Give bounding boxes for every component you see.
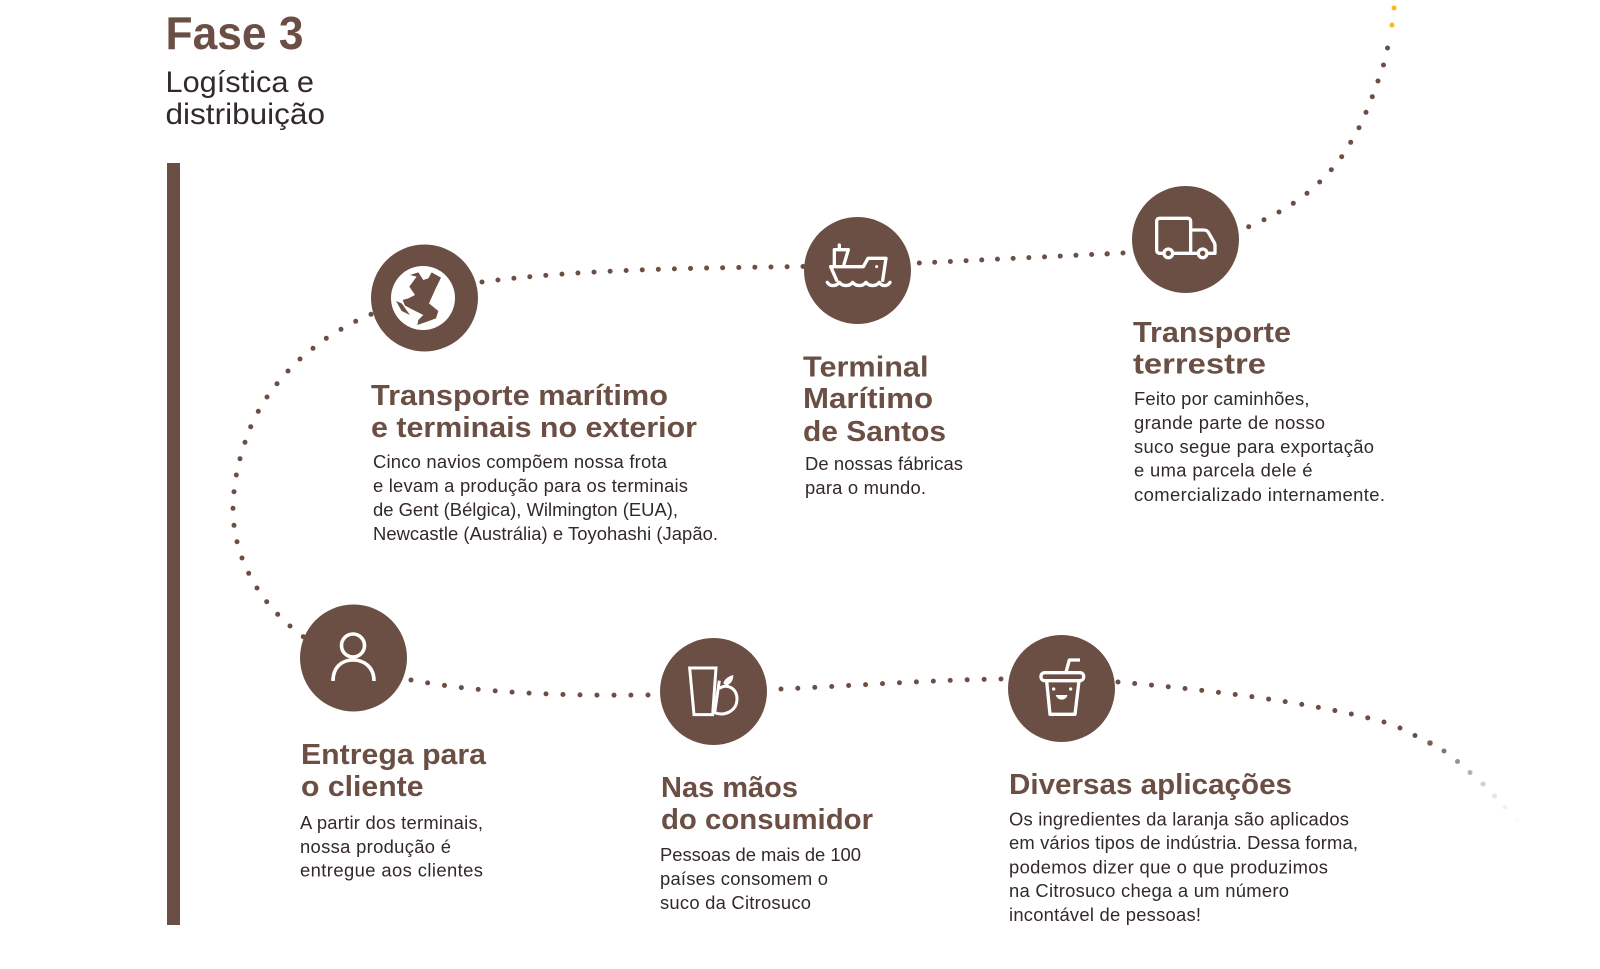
panel: Transporte marítimo: Cinco navios compõem nossa frota: [373, 451, 668, 472]
title: Logística e: [166, 66, 314, 99]
panel: Transporte terrestre: Feito por caminhões,: [1134, 388, 1310, 409]
panel: Nas mãos do consumidor: suco da Citrosuco: [660, 892, 811, 913]
panel: Entrega para o cliente: entregue aos clientes: [300, 860, 483, 880]
panel: Transporte terrestre: comercializado internamente.: [1134, 484, 1385, 505]
panel: Transporte terrestre: e uma parcela dele é: [1134, 460, 1312, 480]
panel: Transporte terrestre: grande parte de nosso: [1134, 412, 1325, 433]
panel: Diversas aplicações: em vários tipos de indústria. Dessa forma,: [1009, 832, 1358, 853]
panel: Nas mãos do consumidor: Pessoas de mais de 100: [660, 844, 861, 865]
panel: Nas mãos do consumidor: Nas mãos: [661, 772, 798, 804]
panel: Transporte terrestre: Transporte: [1133, 317, 1291, 349]
panel: Terminal Marítimo de Santos: De nossas fábricas: [805, 453, 963, 474]
panel: Diversas aplicações: [1009, 769, 1358, 925]
icon: truck: [1132, 186, 1239, 293]
panel: Terminal Marítimo de Santos: de Santos: [803, 416, 946, 448]
icon: globe: [371, 244, 478, 352]
panel: Transporte marítimo: e levam a produção para os terminais: [373, 475, 688, 496]
dotted route: [230, 6, 1519, 822]
panel: Terminal Marítimo de Santos: Terminal: [803, 352, 928, 384]
panel: Diversas aplicações: incontável de pessoas!: [1009, 904, 1201, 925]
panel: Diversas aplicações: na Citrosuco chega a um número: [1009, 880, 1289, 901]
panel: Diversas aplicações: Os ingredientes da laranja são aplicados: [1009, 808, 1349, 830]
panel: Transporte marítimo: Newcastle (Austrália) e Toyohashi (Japão.: [373, 523, 718, 544]
title: Fase 3: [166, 7, 304, 59]
panel: Entrega para o cliente: A partir dos terminais,: [300, 812, 483, 833]
title: distribuição: [166, 98, 325, 131]
panel: Terminal Marítimo de Santos: [803, 352, 963, 498]
panel: Nas mãos do consumidor: países consomem o: [660, 868, 828, 889]
panel: Transporte terrestre: suco segue para exportação: [1134, 436, 1374, 457]
title: [166, 7, 325, 131]
icon: ship: [804, 217, 911, 324]
panel: Transporte marítimo: [371, 380, 718, 544]
panel: Transporte terrestre: terrestre: [1133, 348, 1266, 380]
panel: Diversas aplicações: podemos dizer que o que produzimos: [1009, 856, 1328, 878]
icon: person: [300, 604, 407, 712]
panel: Transporte marítimo: de Gent (Bélgica), Wilmington (EUA),: [373, 499, 678, 520]
panel: Entrega para o cliente: Entrega para: [301, 739, 487, 771]
icon: drink cup: [1008, 635, 1115, 742]
panel: Entrega para o cliente: [300, 739, 487, 880]
vertical bar: [167, 163, 180, 925]
panel: Entrega para o cliente: o cliente: [301, 771, 424, 803]
panel: Terminal Marítimo de Santos: Marítimo: [803, 383, 933, 415]
icon: juice and fruit: [660, 638, 767, 745]
panel: Diversas aplicações: Diversas aplicações: [1009, 769, 1292, 801]
panel: Nas mãos do consumidor: do consumidor: [661, 804, 873, 836]
panel: Transporte marítimo: Transporte marítimo: [371, 380, 668, 412]
panel: Transporte terrestre: [1133, 317, 1385, 505]
panel: Terminal Marítimo de Santos: para o mundo.: [805, 477, 926, 498]
panel: Entrega para o cliente: nossa produção é: [300, 836, 451, 857]
panel: Transporte marítimo: e terminais no exterior: [371, 412, 697, 444]
panel: Nas mãos do consumidor: [660, 772, 873, 913]
